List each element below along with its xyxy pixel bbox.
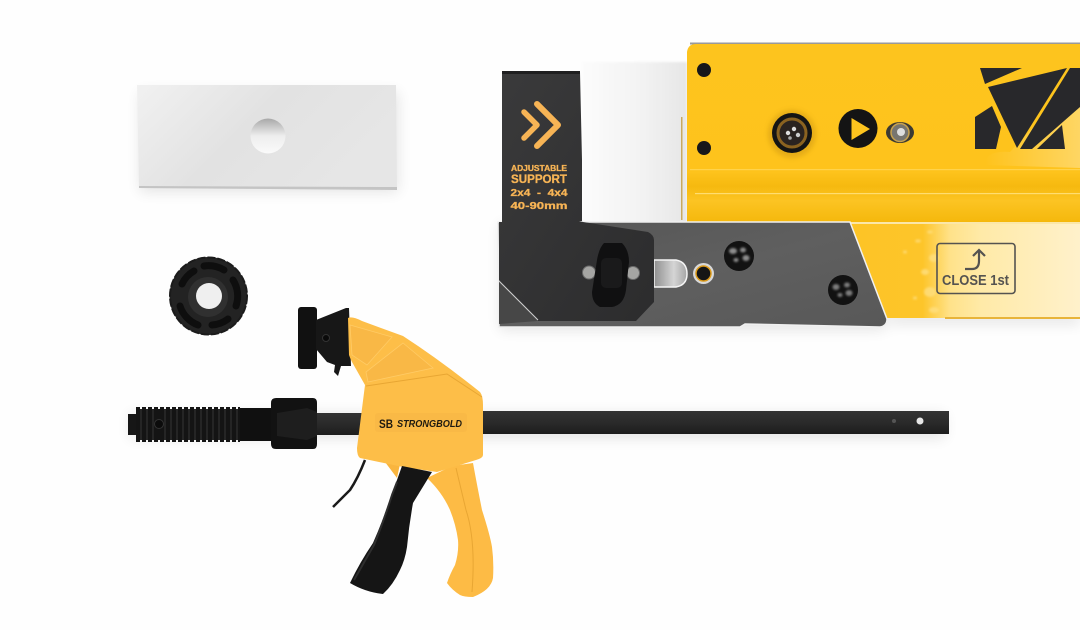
yellow machine body — [681, 42, 1080, 319]
corner screws — [697, 63, 711, 155]
soft shadows — [130, 92, 1080, 438]
glare below logo — [985, 90, 1080, 168]
strongbold logo text — [379, 417, 462, 431]
clamp rod — [315, 413, 365, 435]
support label: ADJUSTABLE — [511, 164, 568, 173]
paint specks — [903, 230, 939, 313]
yellow trigger collar — [385, 462, 400, 478]
gold rimmed screw — [693, 263, 714, 284]
support label: 40-90mm — [510, 200, 568, 212]
rod end grip — [128, 398, 317, 449]
body recesses — [350, 325, 392, 365]
bar clamp — [128, 307, 949, 597]
logo mark — [975, 68, 1080, 149]
close first badge — [937, 244, 1015, 294]
clamp body — [348, 317, 483, 472]
support label: 2x4 - 4x4 — [510, 188, 568, 199]
black trigger — [350, 466, 432, 594]
strongbold logo text: STRONGBOLD — [397, 419, 462, 430]
phillips bolts — [724, 241, 858, 305]
adjustable support bracket — [498, 71, 887, 327]
spring wire — [333, 460, 365, 507]
slot — [654, 260, 687, 287]
metal plate with hole — [137, 85, 397, 190]
close first badge: CLOSE 1st — [942, 273, 1009, 289]
wing nut with screws — [582, 243, 640, 307]
support label — [510, 164, 568, 212]
lock knob — [170, 257, 248, 335]
clamp jaw — [298, 307, 351, 376]
chevron icon — [524, 104, 558, 146]
support label: SUPPORT — [511, 174, 567, 186]
large hex bolt — [768, 110, 816, 158]
yellow handle — [427, 463, 493, 597]
dark upper arm and plate — [499, 72, 654, 321]
play icon — [838, 109, 878, 148]
small silver screw — [886, 122, 914, 143]
steel plate — [498, 222, 887, 327]
strongbold logo text: SB — [379, 417, 393, 431]
